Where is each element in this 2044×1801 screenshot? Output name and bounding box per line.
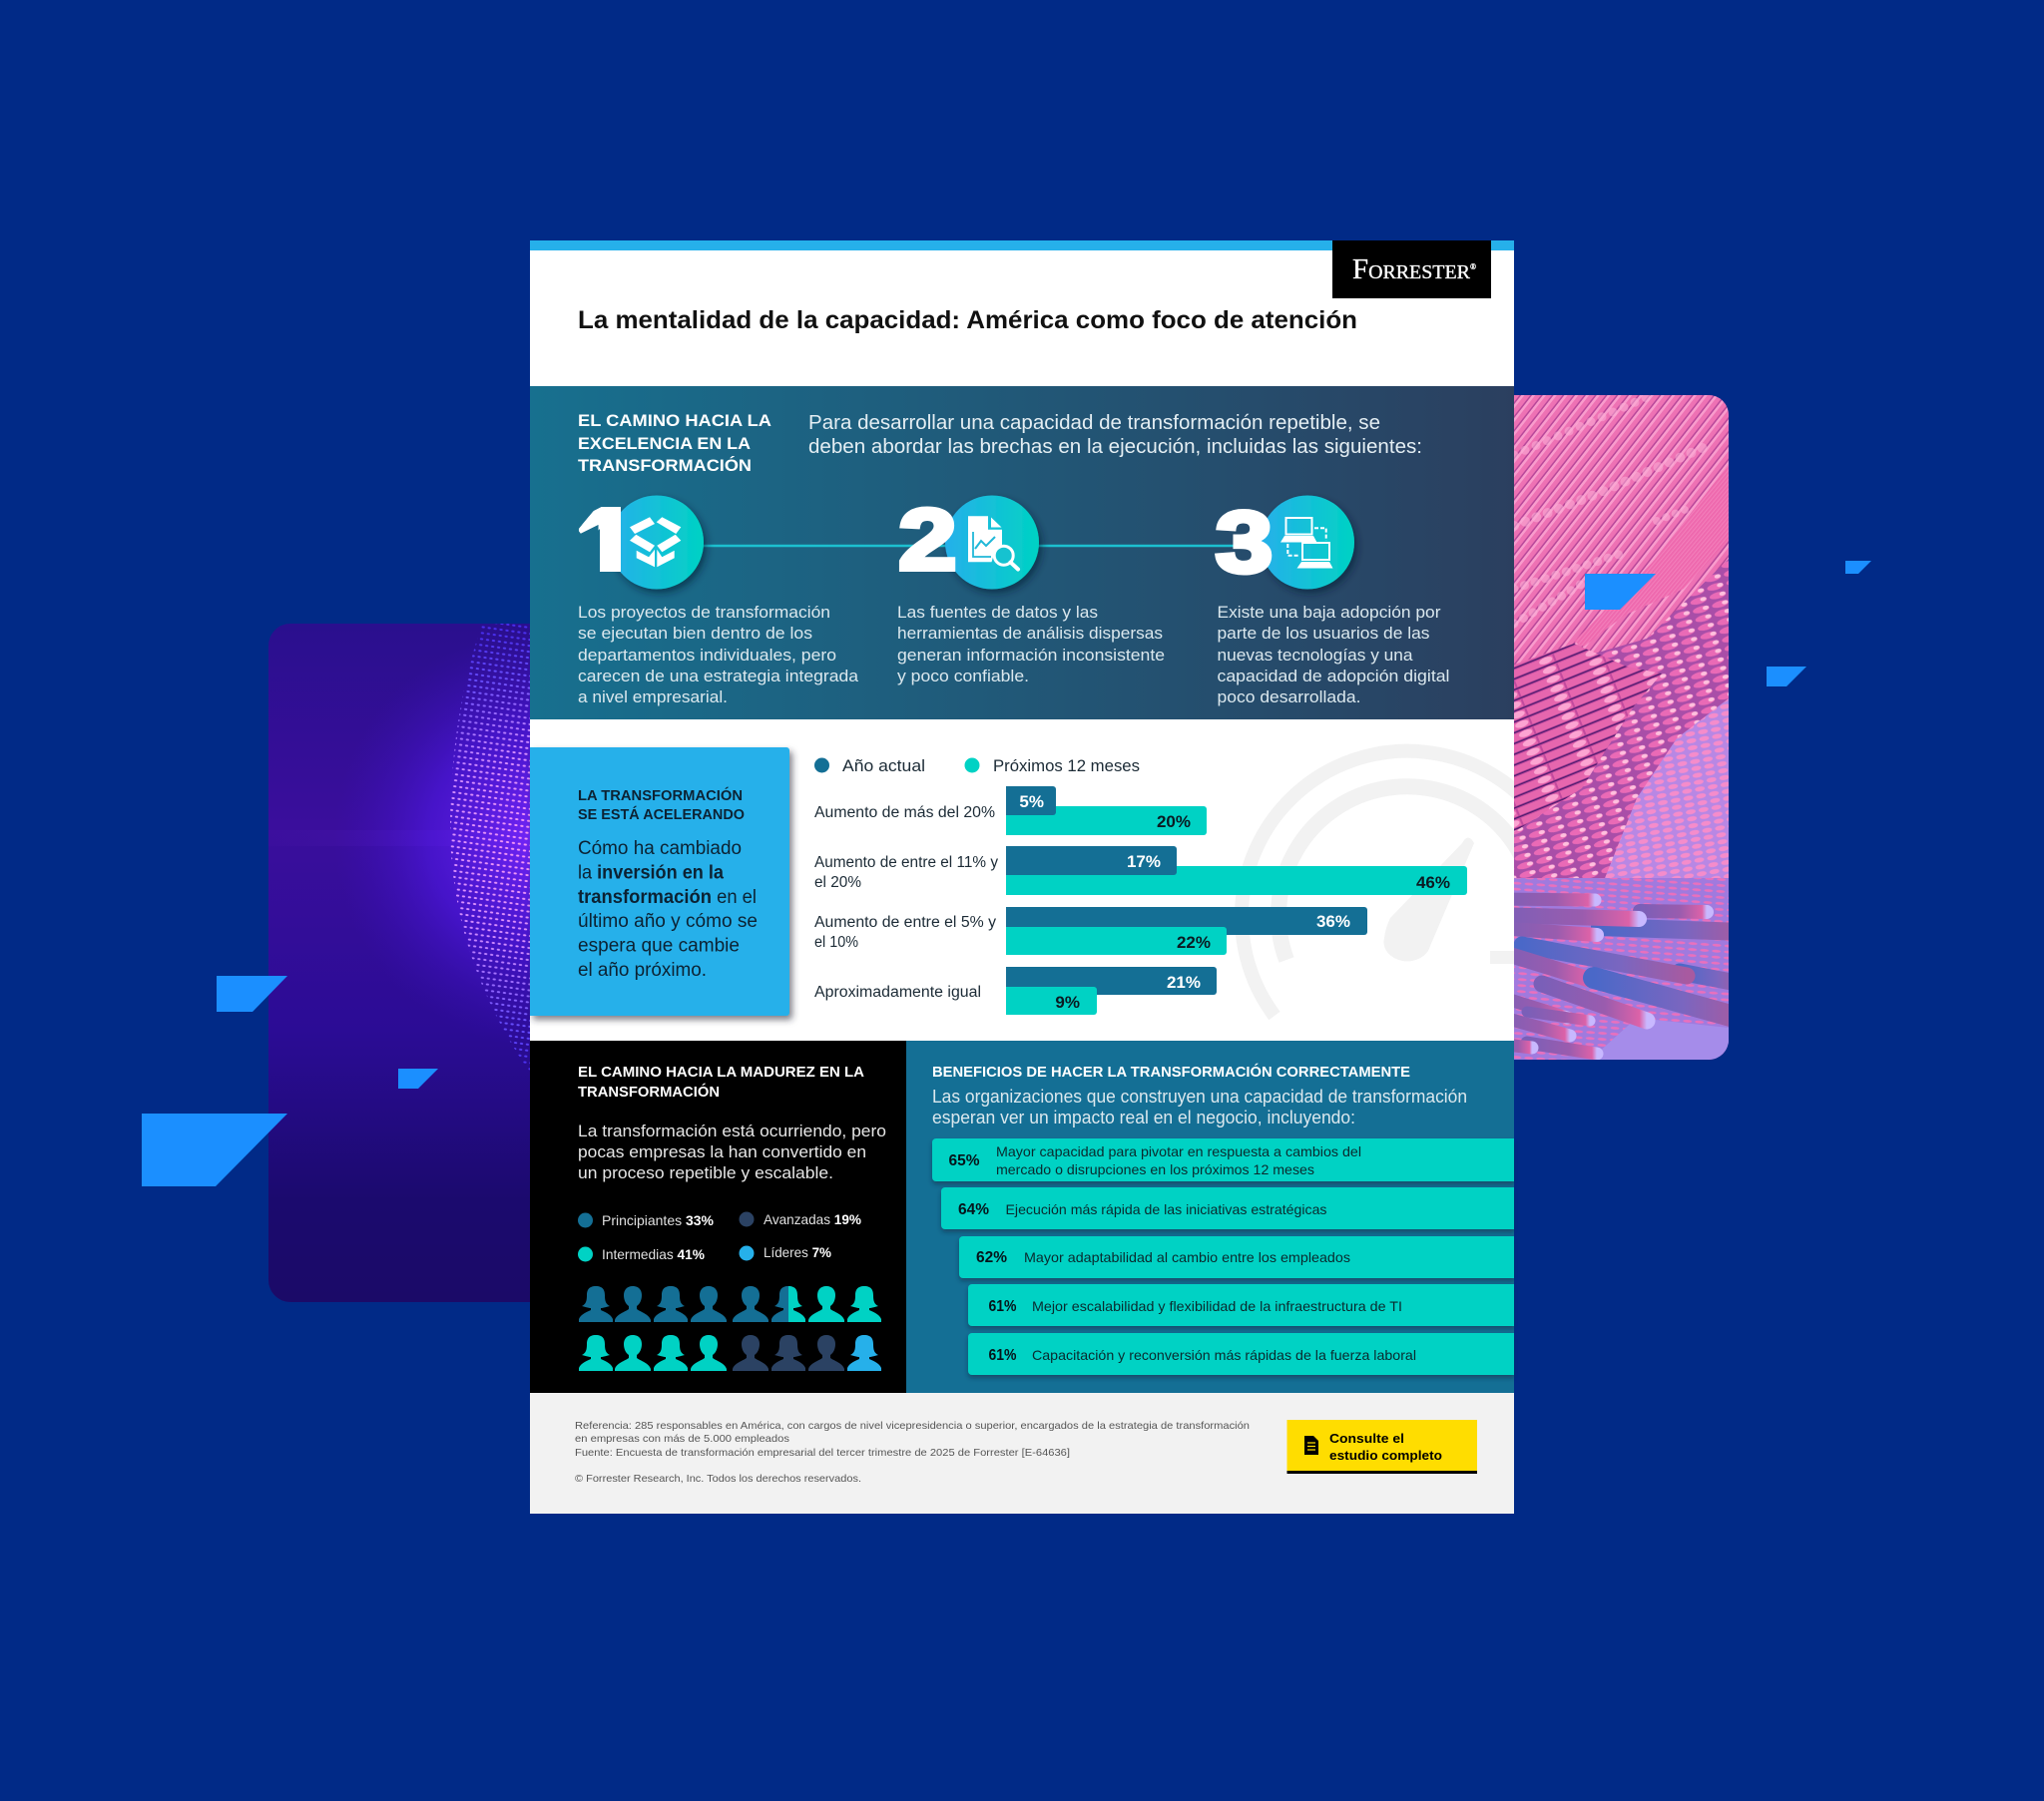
benefit bar 65%: [932, 1138, 1514, 1181]
panel: maturity path: [530, 1041, 906, 1393]
decorative blue shape: [142, 1114, 287, 1186]
benefit bar 61% infrastructure: Mejor escalabilidad y flexibilidad de la infraestructura de TI: [1032, 1298, 1402, 1314]
row 2 bars: 17%: [1127, 852, 1161, 871]
footnotes: Referencia: 285 responsables en América, con cargos de nivel vicepresidencia o superior, encargados de la estrategia de transformación: [575, 1420, 1250, 1432]
step 1 text: departamentos individuales, pero: [578, 646, 836, 665]
benefits intro: Las organizaciones que construyen una capacidad de transformación: [932, 1087, 1467, 1107]
benefits heading: BENEFICIOS DE HACER LA TRANSFORMACIÓN CORRECTAMENTE: [932, 1063, 1410, 1081]
callout heading: SE ESTÁ ACELERANDO: [578, 806, 745, 823]
step 1 text: a nivel empresarial.: [578, 687, 728, 706]
benefit bar 64%: Ejecución más rápida de las iniciativas estratégicas: [1006, 1201, 1327, 1217]
row 4 bars: 9%: [1055, 993, 1080, 1012]
image panel: pink tube texture: [1514, 395, 1729, 1060]
callout heading: LA TRANSFORMACIÓN: [578, 786, 743, 804]
step 1 text: [578, 603, 859, 706]
step 2 text: [897, 603, 1165, 685]
chart legend: [814, 756, 1140, 775]
top accent bar: [530, 240, 1514, 250]
people pictogram: [579, 1286, 881, 1371]
panel: investment callout: [530, 747, 789, 1016]
maturity text: La transformación está ocurriendo, pero: [578, 1122, 886, 1140]
row labels: Aumento de entre el 11% y: [814, 854, 998, 871]
callout text: el año próximo.: [578, 960, 707, 981]
icon: document: [1304, 1436, 1318, 1455]
row 3 bars: [1006, 907, 1367, 955]
decorative blue shape: [1585, 574, 1656, 610]
step 3 text: capacidad de adopción digital: [1218, 667, 1449, 685]
step 2 text: herramientas de análisis dispersas: [897, 624, 1163, 643]
maturity text: un proceso repetible y escalable.: [578, 1163, 833, 1182]
maturity legend: Líderes 7%: [764, 1244, 832, 1260]
footnotes: en empresas con más de 5.000 empleados: [575, 1433, 789, 1445]
step 3 text: parte de los usuarios de las: [1218, 624, 1429, 643]
row 1 bars: 5%: [1019, 792, 1044, 811]
connector line: [699, 545, 1268, 547]
step 3 text: nuevas tecnologías y una: [1218, 646, 1413, 665]
callout text: espera que cambie: [578, 936, 740, 956]
callout heading: [578, 786, 745, 823]
heading: excellence path: EL CAMINO HACIA LA: [578, 412, 771, 430]
step 1 text: carecen de una estrategia integrada: [578, 667, 859, 685]
benefit bar 65%: Mayor capacidad para pivotar en respuesta a cambios del: [996, 1143, 1361, 1159]
benefit bar 65%: 65%: [948, 1152, 980, 1169]
gauge watermark: [1236, 744, 1514, 1020]
benefit bar 61% workforce: [968, 1333, 1514, 1375]
row 4 bars: 21%: [1167, 973, 1201, 992]
benefit bar 62%: [959, 1236, 1514, 1278]
step 1: number and box icon: 1: [574, 489, 640, 594]
intro text: [808, 412, 1422, 458]
panel: benefits: [906, 1041, 1514, 1393]
step 3 text: poco desarrollada.: [1218, 687, 1361, 706]
step 1 text: se ejecutan bien dentro de los: [578, 624, 812, 643]
row 1 bars: [1006, 786, 1207, 835]
benefit bar 61% infrastructure: 61%: [988, 1298, 1016, 1315]
footnotes: [575, 1420, 1250, 1485]
step 3 text: [1218, 603, 1449, 706]
button: read full study: [1287, 1420, 1477, 1474]
row 3 bars: 22%: [1177, 933, 1211, 952]
intro text: deben abordar las brechas en la ejecución, incluidas las siguientes:: [808, 436, 1422, 458]
row 2 bars: [1006, 846, 1467, 895]
step 2 text: Las fuentes de datos y las: [897, 603, 1098, 622]
chart legend: Próximos 12 meses: [993, 756, 1140, 775]
row 3 bars: 36%: [1316, 912, 1350, 931]
decorative blue shape: [1767, 667, 1806, 686]
row 2 bars: 46%: [1416, 873, 1450, 892]
step 3: number and computers icon: [1216, 495, 1354, 591]
step 2 text: y poco confiable.: [897, 667, 1029, 685]
decorative blue shape: [1845, 561, 1871, 574]
benefit bar 62%: 62%: [976, 1249, 1007, 1266]
row labels: el 10%: [814, 934, 858, 951]
benefit bar 64%: 64%: [958, 1201, 989, 1218]
row labels: Aumento de entre el 5% y: [814, 914, 996, 931]
benefit bar 65%: mercado o disrupciones en los próximos 12 meses: [996, 1161, 1314, 1177]
logo: Forrester: ®: [1470, 262, 1476, 271]
decorative blue shape: [398, 1069, 438, 1089]
step 3 text: Existe una baja adopción por: [1218, 603, 1441, 622]
maturity text: pocas empresas la han convertido en: [578, 1142, 866, 1161]
benefit bar 62%: Mayor adaptabilidad al cambio entre los empleados: [1024, 1249, 1350, 1265]
image panel: purple particle sphere: [268, 624, 530, 1302]
maturity heading: [578, 1065, 865, 1101]
maturity legend: Principiantes 33%: [602, 1212, 715, 1228]
decorative blue shape: [217, 976, 287, 1012]
step 3: number and computers icon: 3: [1216, 495, 1273, 591]
callout text: [578, 838, 758, 981]
logo: Forrester: [1332, 240, 1491, 298]
row labels: Aumento de más del 20%: [814, 804, 995, 821]
row labels: Aproximadamente igual: [814, 984, 981, 1001]
benefit bar 64%: [941, 1187, 1514, 1229]
chart legend: Año actual: [842, 756, 925, 775]
callout text: Cómo ha cambiado: [578, 838, 742, 859]
maturity legend: Intermedias 41%: [602, 1246, 706, 1262]
benefits intro: esperan ver un impacto real en el negocio, incluyendo:: [932, 1108, 1355, 1127]
benefit bar 61% infrastructure: [968, 1284, 1514, 1326]
maturity legend: [578, 1211, 862, 1262]
callout text: la inversión en la: [578, 862, 724, 884]
button: read full study: Consulte el: [1329, 1431, 1404, 1446]
heading: excellence path: TRANSFORMACIÓN: [578, 456, 752, 475]
intro text: Para desarrollar una capacidad de transformación repetible, se: [808, 412, 1380, 434]
bar chart: investment change: [814, 786, 1467, 1015]
logo: Forrester: FORRESTER: [1352, 253, 1470, 285]
row 1 bars: 20%: [1157, 812, 1191, 831]
benefit bar 61% workforce: Capacitación y reconversión más rápidas de la fuerza laboral: [1032, 1347, 1416, 1363]
panel: excellence path: [530, 386, 1514, 719]
callout text: transformación en el: [578, 887, 757, 908]
row labels: [814, 804, 998, 1001]
maturity heading: TRANSFORMACIÓN: [578, 1083, 720, 1101]
benefit bar 61% workforce: 61%: [988, 1347, 1016, 1364]
step 1 text: Los proyectos de transformación: [578, 603, 830, 622]
heading: excellence path: EXCELENCIA EN LA: [578, 435, 751, 453]
step 2: number and document search icon: 2: [898, 493, 956, 589]
step 2 text: generan información inconsistente: [897, 646, 1165, 665]
maturity heading: EL CAMINO HACIA LA MADUREZ EN LA: [578, 1065, 865, 1081]
maturity legend: Avanzadas 19%: [764, 1211, 862, 1227]
step 1: number and box icon: [574, 489, 704, 594]
button: read full study: estudio completo: [1329, 1448, 1442, 1463]
row labels: el 20%: [814, 874, 861, 891]
callout text: último año y cómo se: [578, 911, 758, 932]
footnotes: Fuente: Encuesta de transformación empresarial del tercer trimestre de 2025 de Forrester [E-64636]: [575, 1447, 1070, 1459]
heading: excellence path: [578, 412, 771, 475]
title: La mentalidad de la capacidad: América como foco de atención: [578, 306, 1357, 334]
benefits intro: [932, 1087, 1467, 1127]
footer: [530, 1393, 1514, 1514]
step 2: number and document search icon: [898, 493, 1039, 589]
footnotes: © Forrester Research, Inc. Todos los derechos reservados.: [575, 1473, 861, 1485]
maturity text: [578, 1122, 886, 1182]
infographic card: [530, 240, 1573, 1514]
row 4 bars: [1006, 967, 1217, 1015]
